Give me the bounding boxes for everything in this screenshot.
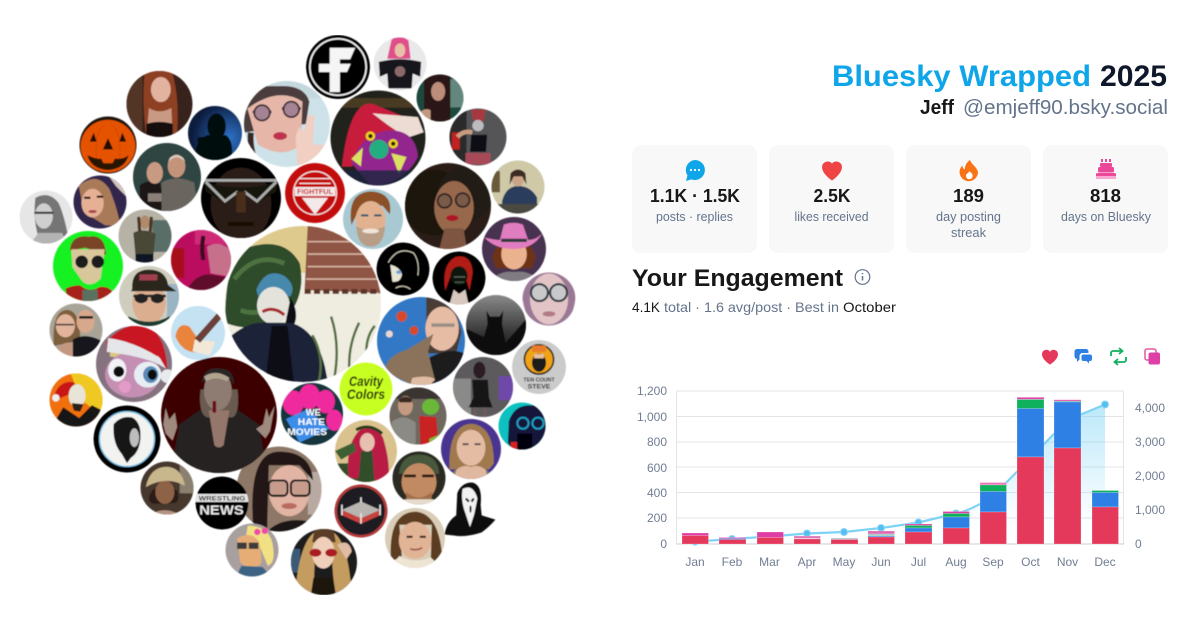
month labels: Apr [798, 555, 816, 569]
right axis labels: 3,000 [1135, 435, 1165, 449]
cumulative area [695, 404, 1105, 544]
month labels: May [833, 555, 855, 569]
avatar: red hair masked figure [432, 252, 486, 304]
avatar: Wrestling News logo: WRESTLING [199, 495, 245, 502]
avatar: Fightful logo [285, 163, 345, 223]
month labels [685, 555, 1116, 569]
title: Bluesky Wrapped [832, 60, 1091, 93]
avatar: tiger drawing [171, 306, 225, 360]
avatar: bloody goth with peace signs [161, 357, 277, 473]
right axis labels: 4,000 [1135, 401, 1165, 415]
avatar: We Hate Movies logo: HATE [298, 417, 325, 427]
avatar: masked figure in coat [225, 226, 381, 382]
icon: legend quotes [1145, 349, 1160, 364]
left axis labels: 400 [647, 486, 667, 500]
left axis labels: 800 [647, 435, 667, 449]
avatar: long-haired man [118, 210, 172, 262]
avatar: Ten Count Steve logo [512, 340, 566, 394]
stat label: likes: likes received [794, 210, 869, 224]
avatar: couple selfie [50, 304, 102, 356]
avatar: curly hair woman [402, 163, 493, 249]
engagement summary: 4.1K [632, 299, 661, 315]
avatar: redhead [126, 71, 192, 137]
avatar: woman with red sunglasses [291, 529, 357, 595]
icon: info [855, 270, 870, 284]
avatar: Ghost Rider Santa [50, 374, 102, 426]
stat value: posts and replies: 1.1K · 1.5K [650, 185, 741, 206]
avatar: man in pith helmet [140, 462, 194, 514]
avatar: Fightful logo: FIGHTFUL [297, 187, 333, 196]
avatar: woman in purple room [453, 357, 513, 417]
avatar: goth woman green [416, 74, 464, 122]
avatar: pumpkin [80, 116, 136, 174]
avatar: peace sign selfie [244, 81, 330, 167]
avatar: blonde woman [74, 176, 126, 228]
panel: streak stat [906, 145, 1031, 253]
avatar: Ten Count Steve logo: TEN COUNT [523, 378, 555, 384]
icon: speech bubble [686, 160, 705, 181]
avatar: wrestling ring icon [334, 484, 388, 538]
icon: heart [822, 162, 842, 180]
avatar: Hank cartoon [226, 524, 278, 576]
avatar: grayscale woman [20, 190, 73, 244]
avatar: Vader with glasses [498, 402, 546, 450]
avatar: man with green hair [392, 452, 446, 504]
user name and handle: Jeff [920, 97, 954, 119]
icon: legend likes [1042, 350, 1058, 364]
right axis labels: 0 [1135, 537, 1142, 551]
avatar: pink headphones [171, 230, 231, 290]
panel: likes stat [769, 145, 894, 253]
avatar: Wrestling News logo: NEWS [199, 503, 244, 518]
avatar: dark goat silhouette [466, 295, 526, 355]
avatar: Ghostface [445, 483, 495, 536]
avatar: denim woman [492, 160, 544, 214]
month labels: Aug [945, 555, 967, 569]
chart: monthly engagement [637, 384, 1165, 569]
engagement summary: October [843, 299, 896, 315]
left axis labels [637, 384, 667, 551]
stat value: streak: 189 [953, 185, 984, 206]
stat label: posts and replies: posts · replies [656, 210, 733, 224]
avatar: two men [133, 143, 201, 211]
left axis labels: 200 [647, 511, 667, 525]
stat value: likes: 2.5K [814, 185, 851, 206]
line points [692, 401, 1108, 545]
avatar: woman on purple [441, 419, 501, 479]
avatar: smiling woman [385, 508, 445, 568]
avatar: We Hate Movies logo: WE [306, 407, 321, 417]
engagement summary: total · 1.6 avg/post · Best in [664, 299, 839, 315]
avatar: bearded illustration [343, 189, 403, 249]
icon: legend replies [1074, 349, 1092, 364]
stat label: day posting: day posting [936, 210, 1001, 224]
avatar: zombie figure on white [94, 406, 160, 472]
right axis labels [1135, 401, 1165, 551]
avatar: Ten Count Steve logo: STEVE [528, 384, 551, 391]
avatar: Cavity Colors logo [340, 362, 392, 416]
month labels: Mar [759, 555, 780, 569]
avatar: mirror selfie [450, 108, 506, 166]
stat label: days: days on Bluesky [1061, 210, 1152, 224]
icon: legend reposts [1111, 348, 1126, 365]
chart legend [1042, 348, 1160, 365]
avatar: pink glasses portrait [522, 272, 576, 326]
cumulative line [695, 404, 1105, 542]
avatar: green screen mask cartoon [53, 231, 123, 301]
icon: flame [960, 160, 978, 181]
avatar: man in glasses [201, 158, 281, 241]
right axis labels: 1,000 [1135, 503, 1165, 517]
month labels: Jan [685, 555, 705, 569]
month labels: Jun [871, 555, 891, 569]
engagement summary [632, 299, 896, 315]
heading: your engagement: Your Engagement [632, 265, 843, 292]
avatar: Bubbles in Santa hat [96, 326, 174, 402]
avatar: blue silhouette [188, 106, 242, 160]
avatar: man in cap and shades [119, 266, 179, 326]
panel: posts and replies stat [632, 145, 757, 253]
avatar: We Hate Movies logo [281, 383, 343, 445]
stat value: days: 818 [1090, 185, 1121, 206]
left axis labels: 1,000 [637, 410, 667, 424]
month labels: Jul [911, 555, 926, 569]
avatar: woman with iguana [377, 297, 465, 385]
avatar: pink hair figure [374, 37, 426, 90]
avatar: woman in dark glasses [236, 446, 322, 532]
month labels: Feb [722, 555, 743, 569]
month labels: Dec [1094, 555, 1116, 569]
avatar: F logo [306, 35, 370, 99]
avatar: monster plush in Santa hat [330, 90, 426, 186]
user name and handle: @emjeff90.bsky.social [963, 97, 1168, 119]
avatar: We Hate Movies logo: MOVIES [287, 427, 327, 437]
avatar: Cavity Colors logo: Colors [347, 387, 385, 402]
icon: birthday cake [1096, 159, 1116, 179]
avatar: cowgirl pixel art [482, 217, 546, 281]
title: 2025 [1100, 60, 1167, 93]
panel: days on Bluesky stat [1043, 145, 1168, 253]
avatar: Cavity Colors logo: Cavity [349, 374, 384, 389]
avatar: goth cartoon [376, 242, 430, 296]
month labels: Sep [982, 555, 1004, 569]
stacked bars [682, 397, 1118, 544]
left axis labels: 600 [647, 461, 667, 475]
avatar: man with Grinch [390, 388, 446, 444]
left axis labels: 0 [660, 537, 667, 551]
avatar: Wrestling News logo [196, 476, 248, 530]
panel: avatar cluster [20, 35, 576, 595]
left axis labels: 1,200 [637, 384, 667, 398]
month labels: Nov [1057, 555, 1078, 569]
stat label: streak: streak [951, 226, 987, 240]
month labels: Oct [1021, 555, 1040, 569]
right axis labels: 2,000 [1135, 469, 1165, 483]
avatar: Poison Ivy cosplay [335, 420, 397, 482]
